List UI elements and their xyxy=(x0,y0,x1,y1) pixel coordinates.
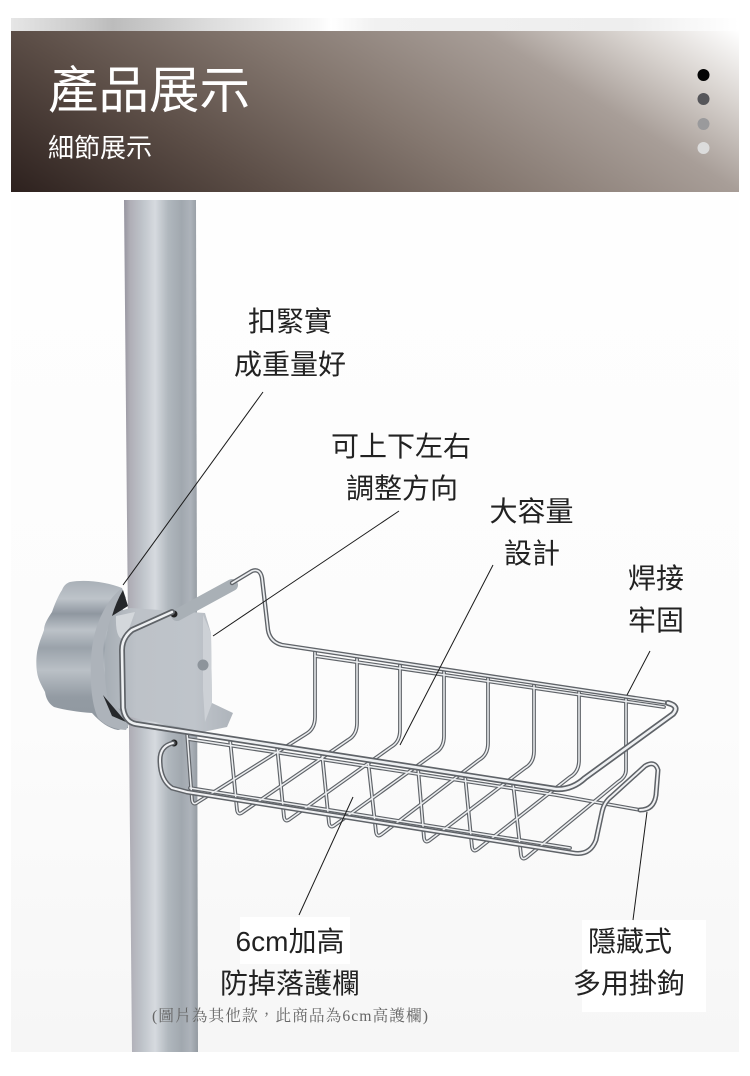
back rail xyxy=(232,570,668,703)
pole xyxy=(124,200,198,1052)
white label backings xyxy=(240,917,706,1012)
clamp highlight xyxy=(116,612,135,640)
hanging hook wire xyxy=(160,743,658,853)
callout: welding: 焊接 xyxy=(628,563,684,594)
callout: capacity: 設計 xyxy=(504,538,560,569)
top decorative strip xyxy=(11,18,739,31)
callout: adjustable: 調整方向 xyxy=(346,473,458,504)
callout: hidden hook: 多用掛鉤 xyxy=(573,968,685,999)
clamp assembly xyxy=(36,581,233,746)
callout leader lines xyxy=(123,392,650,920)
product photo background xyxy=(11,200,739,1052)
thin wires xyxy=(187,650,664,859)
clamp side groove xyxy=(203,615,212,722)
knob xyxy=(36,581,128,730)
callout: clamp: 成重量好 xyxy=(234,349,346,380)
callout: welding: 牢固 xyxy=(628,605,684,636)
callout: guardrail: 6cm加高 xyxy=(236,926,344,957)
footnote: (圖片為其他款，此商品為6cm高護欄) xyxy=(152,1006,428,1025)
front rail xyxy=(122,612,676,789)
page indicator dots xyxy=(698,69,710,154)
subtitle: 細節展示 xyxy=(48,133,152,163)
wire basket xyxy=(122,570,676,859)
callout: hidden hook: 隱藏式 xyxy=(588,926,672,957)
callout: clamp: 扣緊實 xyxy=(248,306,332,337)
grey handle xyxy=(177,585,232,615)
header banner xyxy=(11,31,739,192)
callout: guardrail: 防掉落護欄 xyxy=(220,968,360,999)
pivot pin xyxy=(198,660,208,670)
clamp body xyxy=(105,608,233,732)
callout: adjustable: 可上下左右 xyxy=(331,431,471,462)
knob flange xyxy=(91,588,130,730)
callout: capacity: 大容量 xyxy=(489,496,574,527)
title: 產品展示 xyxy=(48,62,250,119)
dark gaps xyxy=(112,590,128,616)
